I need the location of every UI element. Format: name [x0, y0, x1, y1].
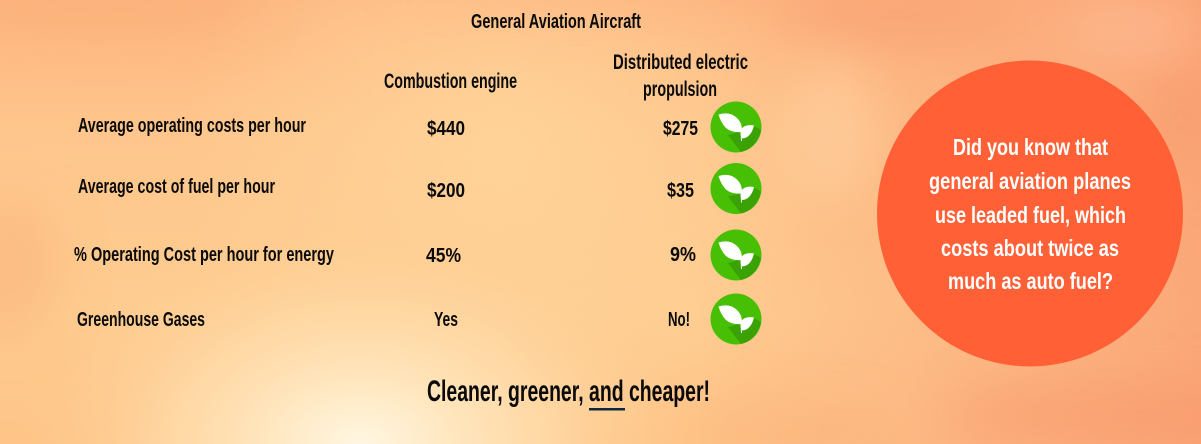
- row: operating cost for energy: [74, 243, 696, 267]
- callout circle: Did you know that: [953, 134, 1108, 160]
- column heading: distributed electric propulsion: Distributed electric: [613, 51, 748, 74]
- callout circle: much as auto fuel?: [948, 268, 1113, 294]
- row: operating cost for energy: % Operating Cost per hour for energy: [74, 243, 334, 266]
- icon: leaf badge row 2: [710, 163, 762, 214]
- column heading: combustion engine: Combustion engine: [384, 70, 517, 93]
- callout circle: [877, 60, 1183, 366]
- row: average operating costs: $275: [663, 117, 698, 140]
- column heading: distributed electric propulsion: propulsion: [643, 78, 717, 101]
- row: average cost of fuel: [78, 175, 694, 202]
- row: average cost of fuel: $35: [667, 179, 694, 202]
- row: average operating costs: [78, 114, 698, 140]
- row: greenhouse gases: Greenhouse Gases: [77, 308, 205, 331]
- callout circle: general aviation planes: [929, 168, 1131, 194]
- icon: leaf badge row 3: [710, 230, 762, 280]
- row: average operating costs: $440: [427, 117, 465, 140]
- row: average cost of fuel: $200: [427, 179, 465, 202]
- row: operating cost for energy: 45%: [426, 244, 461, 267]
- row: greenhouse gases: No!: [668, 308, 690, 331]
- callout circle: use leaded fuel, which: [935, 202, 1126, 228]
- row: greenhouse gases: Yes: [434, 308, 458, 331]
- icon: leaf badge row 1: [710, 102, 762, 152]
- row: operating cost for energy: 9%: [670, 243, 696, 266]
- row: greenhouse gases: [77, 308, 690, 331]
- row: average cost of fuel: Average cost of fuel per hour: [78, 175, 275, 198]
- row: average operating costs: Average operating costs per hour: [78, 114, 306, 137]
- column heading: distributed electric propulsion: [613, 51, 748, 101]
- title: General Aviation Aircraft: [471, 11, 641, 33]
- callout circle: costs about twice as: [941, 235, 1119, 261]
- icon: leaf badge row 4: [710, 294, 762, 344]
- tagline: Cleaner, greener, and cheaper!: [427, 375, 710, 408]
